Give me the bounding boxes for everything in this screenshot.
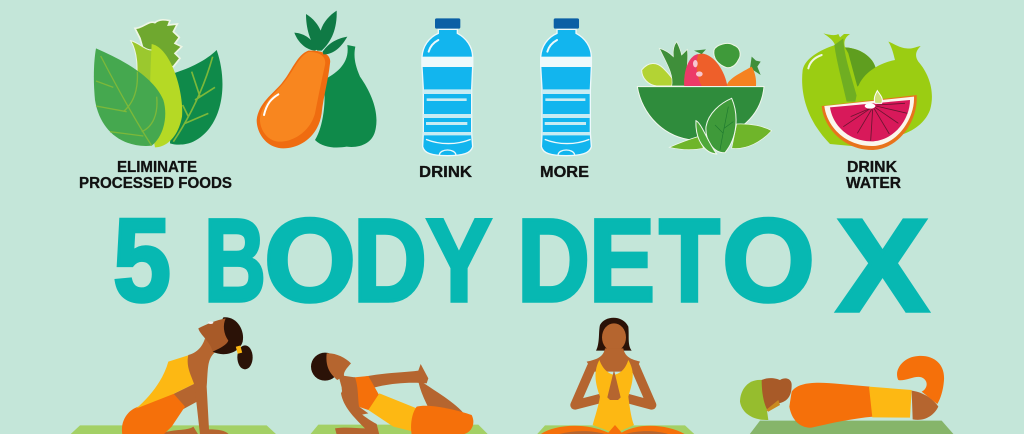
yoga figure: seated meditation on mat: [537, 318, 695, 434]
yoga figure: back bend on mat: [310, 353, 488, 434]
title: 5 BODY DETO X: B: [204, 195, 266, 327]
title: 5 BODY DETO X: O: [264, 195, 356, 327]
label: DRINK: DRINK: [847, 159, 898, 176]
icon: leafy greens: [94, 20, 222, 147]
label: DRINK: DRINK: [419, 164, 473, 181]
title: 5 BODY DETO X: Y: [426, 195, 492, 327]
yoga figure: camel pose on mat: [70, 317, 277, 434]
title: 5 BODY DETO X: D: [353, 195, 427, 327]
title: 5 BODY DETO X: X: [836, 192, 929, 339]
yoga figure: prone pose on mat: [740, 356, 954, 434]
title: 5 BODY DETO X: 5: [113, 195, 171, 327]
title: 5 BODY DETO X: D: [517, 195, 590, 327]
label: WATER: WATER: [846, 175, 901, 192]
title: 5 BODY DETO X: O: [722, 195, 815, 327]
title: 5 BODY DETO X: T: [659, 195, 720, 327]
icon: salad bowl: [637, 42, 772, 154]
icon: papaya and fig: [257, 11, 376, 148]
icon: water bottle 1: [421, 18, 473, 156]
label: ELIMINATE: ELIMINATE: [117, 159, 197, 176]
icon: pomegranates and citrus slice: [802, 33, 932, 150]
title: 5 BODY DETO X: E: [589, 195, 655, 327]
title: 5 BODY DETO X: [113, 192, 929, 339]
icon: water bottle 2: [540, 18, 592, 156]
label: PROCESSED FOODS: PROCESSED FOODS: [79, 175, 232, 192]
label: MORE: MORE: [540, 164, 589, 181]
